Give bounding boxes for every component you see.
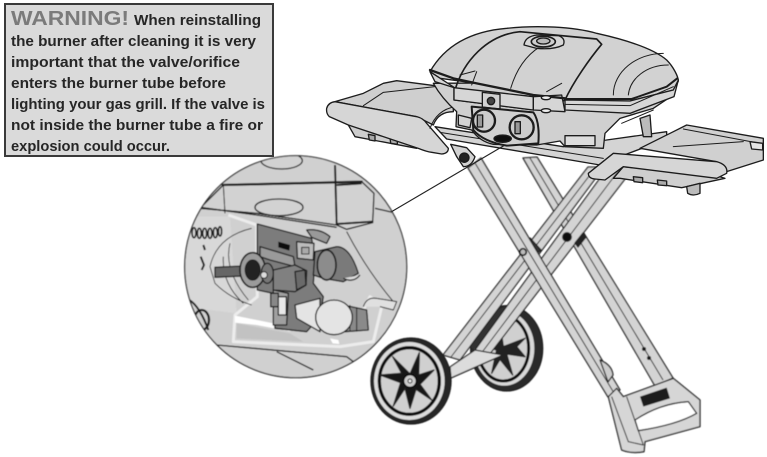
hinge hardware <box>525 238 541 255</box>
warning callout box: enters the burner tube before <box>11 76 226 92</box>
front rail A <box>443 167 604 360</box>
left side table <box>327 81 455 154</box>
hood support <box>640 115 652 137</box>
rear wheel <box>468 306 543 391</box>
magnified detail circle <box>183 152 407 378</box>
back leg <box>523 157 673 386</box>
orifice with nut <box>215 253 273 287</box>
warning callout box: lighting your gas grill. If the valve is <box>11 97 265 113</box>
lid rim band <box>430 70 678 113</box>
valve assembly <box>257 224 360 332</box>
warning callout box: not inside the burner tube a fire or <box>11 118 263 134</box>
grill stand legs and wheels <box>371 157 700 453</box>
warning callout box: important that the valve/orifice <box>11 55 240 71</box>
firebox <box>433 82 677 148</box>
warning callout box <box>5 4 273 156</box>
grill lid section <box>200 152 397 302</box>
warning callout box: explosion could occur. <box>11 139 170 155</box>
lid vent <box>524 35 564 49</box>
front rail B <box>475 170 632 359</box>
lid <box>430 27 678 102</box>
right side table <box>588 125 763 195</box>
white bracket frame <box>210 215 382 370</box>
warning callout box: WARNING! <box>11 8 129 30</box>
gas pipe and end cap <box>295 298 397 335</box>
warning callout box: When reinstalling <box>134 13 261 29</box>
grill body with side tables <box>327 27 763 195</box>
burner coil and left panel <box>186 226 234 331</box>
leader line <box>391 145 505 212</box>
warning callout box: the burner after cleaning it is very <box>11 34 256 50</box>
foot and handle <box>608 378 700 453</box>
main leg <box>468 158 620 397</box>
rail brace <box>450 350 503 378</box>
control panel with knobs <box>458 107 539 146</box>
front wheel <box>371 338 451 424</box>
pivot bracket <box>451 144 475 167</box>
crossbar <box>435 127 667 165</box>
